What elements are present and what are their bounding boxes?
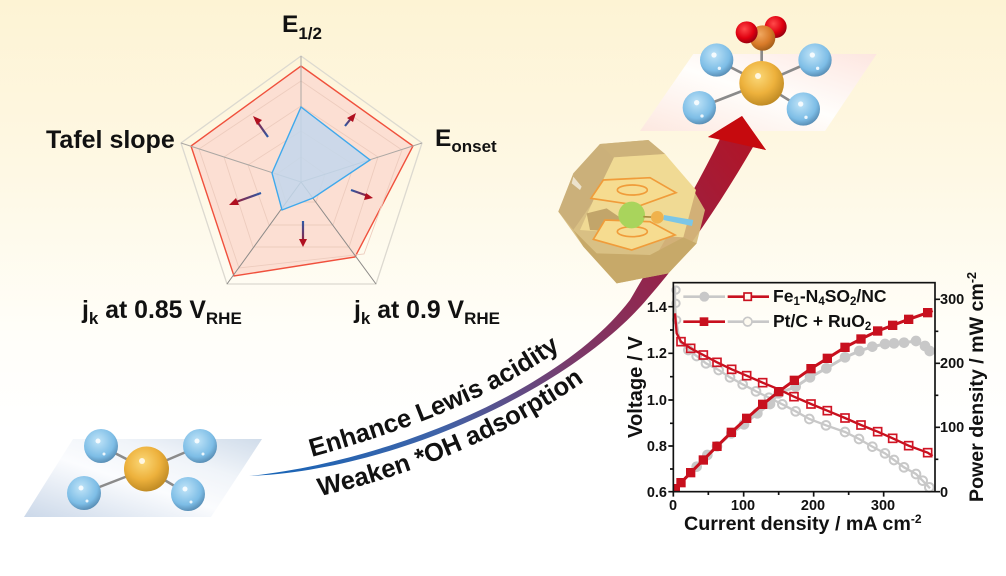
legend symbols: [683, 297, 769, 322]
bottom axis ticks: [669, 498, 895, 514]
x axis label: -2: [911, 512, 922, 526]
bottom axis ticks: 200: [801, 498, 825, 514]
radar label: E1/2: 1/2: [298, 24, 322, 43]
legend text: SO: [825, 286, 850, 306]
right axis label: -2: [965, 272, 979, 283]
legend text: 1: [793, 296, 800, 308]
radar label: jk at 0.9 VRHE: RHE: [464, 309, 500, 328]
radar label: jk at 0.9 VRHE: k: [361, 309, 371, 328]
radar series: Fe1-N4SO2/NC: [191, 66, 413, 276]
central atom: [618, 202, 645, 228]
radar label: jk at 0.9 VRHE: j: [354, 297, 361, 324]
right axis ticks: 200: [940, 356, 964, 372]
legend text: /NC: [856, 286, 887, 306]
right axis ticks: 300: [940, 292, 964, 308]
radar label: jk at 0.85 VRHE: RHE: [206, 309, 242, 328]
radar label: Eonset: onset: [451, 137, 497, 156]
left axis ticks: 1.0: [647, 393, 667, 409]
arrow caption: Enhance Lewis acidity: Enhance Lewis acidity: [308, 338, 556, 456]
radar label: jk at 0.85 VRHE: k: [89, 309, 99, 328]
right axis ticks: 100: [940, 420, 964, 436]
legend text: 2: [850, 296, 856, 308]
radar label: Tafel slope: Tafel slope: [46, 126, 175, 154]
radar arrows: [229, 113, 373, 247]
legend text: -N: [800, 286, 818, 306]
right axis ticks: [940, 292, 964, 501]
left axis ticks: 1.4: [647, 300, 667, 316]
right axis ticks: 0: [940, 485, 948, 501]
radar label: jk at 0.9 VRHE: at 0.9 V: [370, 297, 465, 324]
polarization and power density plot: [625, 272, 988, 535]
polarization and power density plot: 2: [865, 321, 871, 333]
left axis ticks: [647, 300, 667, 501]
radar chart: [181, 56, 422, 284]
bottom axis ticks: 100: [731, 498, 755, 514]
radar label: E1/2: E: [282, 11, 298, 38]
molecule: after (with OH adsorbate on pink plane): [640, 16, 877, 131]
left axis ticks: 0.8: [647, 439, 667, 455]
plot frame: [668, 283, 940, 497]
bottom axis ticks: 0: [669, 498, 677, 514]
polyhedron catalyst particle: [558, 140, 705, 283]
radar label: Eonset: E: [435, 125, 451, 152]
graphene sheets: [591, 178, 676, 250]
molecule: before (Fe-N4 on blue plane): [24, 429, 262, 517]
bottom axis ticks: 300: [871, 498, 895, 514]
radar label: jk at 0.85 VRHE: j: [82, 297, 89, 324]
left axis ticks: 0.6: [647, 485, 667, 501]
left axis ticks: 1.2: [647, 346, 667, 362]
curved gradient arrow: [249, 116, 766, 476]
left axis label: Voltage / V: [625, 336, 647, 438]
radar series: Pt/C + RuO2: [272, 107, 370, 210]
legend text: Fe: [773, 286, 793, 306]
plot curves: [668, 283, 940, 497]
legend text: 4: [818, 296, 825, 308]
arrow caption: Weaken *OH adsorption: Weaken *OH adsorption: [316, 372, 583, 496]
radar label: jk at 0.85 VRHE: at 0.85 V: [98, 297, 206, 324]
right axis label: Power density / mW cm: [966, 283, 988, 502]
x axis label: Current density / mA cm: [684, 513, 911, 535]
polarization and power density plot: Pt/C + RuO: [773, 311, 865, 331]
